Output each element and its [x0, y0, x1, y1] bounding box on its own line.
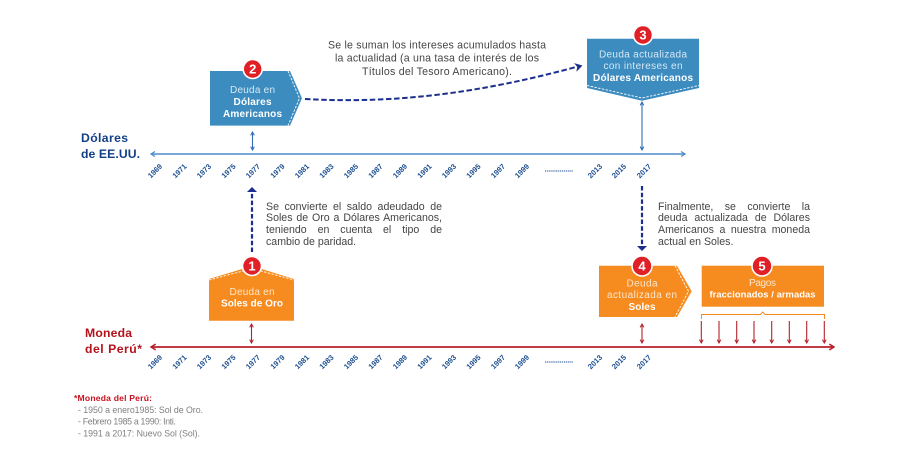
- dollar timeline years: 2013: [586, 162, 604, 180]
- footnote: Moneda del Perú: *Moneda del Perú:: [74, 393, 152, 403]
- step 4: orange box Deuda actualizada en Soles: [599, 256, 692, 317]
- dollar timeline years: 2017: [635, 162, 653, 180]
- text: conversion to soles: deuda actualizada de Dólares: [658, 212, 810, 224]
- step 4: orange box Deuda actualizada en Soles: 4: [638, 258, 646, 274]
- Peruvian timeline years: 1989: [391, 353, 409, 371]
- text: conversion to soles: Americanos a nuestra moneda: [658, 224, 810, 236]
- Peruvian timeline years: 1999: [513, 353, 531, 371]
- Peruvian timeline years: 2013: [586, 353, 604, 371]
- step 5: orange box Pagos fraccionados / armadas: fraccionados / armadas: [710, 288, 816, 299]
- text: conversion to dollars: Soles de Oro a Dólares Americanos,: [266, 212, 442, 224]
- Peruvian timeline years: 1985: [342, 353, 360, 371]
- step 3: blue box Deuda actualizada: 3: [639, 28, 647, 42]
- dashed curved arrow: step 2 to step 3: [305, 61, 584, 100]
- Peruvian timeline years: 1969: [146, 353, 164, 371]
- dollar timeline years: 1983: [317, 162, 336, 180]
- axis: dollar timeline: [151, 153, 685, 155]
- text: interest explanation: [328, 39, 546, 78]
- footnote: Moneda del Perú: - 1991 a 2017: Nuevo Sol (Sol).: [78, 429, 200, 439]
- Peruvian timeline years: 1973: [195, 353, 213, 371]
- double arrow: step 2 to dollar axis: [252, 132, 254, 150]
- dollar timeline years: 1991: [415, 162, 434, 180]
- double arrow: step 1 to Peruvian axis: [250, 324, 252, 343]
- step 2: blue box Deuda en Dólares Americanos: Dólares: [234, 97, 272, 108]
- step 2: blue box Deuda en Dólares Americanos: 2: [249, 62, 256, 76]
- dollar timeline years: 1975: [219, 162, 238, 180]
- dollar timeline years: 1987: [366, 162, 385, 180]
- Peruvian timeline years: 1995: [464, 353, 483, 371]
- step 3: blue box Deuda actualizada: [587, 26, 699, 101]
- text: interest explanation: Títulos del Tesoro Americano).: [362, 66, 512, 78]
- step 5: orange box Pagos fraccionados / armadas: [702, 256, 824, 307]
- step 5: orange box Pagos fraccionados / armadas: 5: [758, 258, 766, 274]
- text: conversion to dollars: Se convierte el saldo adeudado de: [266, 200, 442, 212]
- dollar timeline years: 1989: [391, 162, 409, 180]
- Peruvian timeline years: 1977: [244, 353, 262, 371]
- label: Dólares de EE.UU.: de EE.UU.: [81, 147, 140, 161]
- footnote: Moneda del Perú: - Febrero 1985 a 1990: Inti.: [78, 416, 176, 426]
- double arrow: step 3 to dollar axis: [641, 102, 643, 150]
- bracket: payments: [702, 312, 824, 319]
- text: interest explanation: la actualidad (a una tasa de interés de los: [335, 53, 539, 65]
- text: interest explanation: Se le suman los intereses acumulados hasta: [328, 39, 546, 51]
- text: conversion to soles: Finalmente, se convierte la: [658, 200, 810, 212]
- Peruvian timeline years: 1975: [219, 353, 238, 371]
- dotted gap: Peruvian timeline: [545, 361, 573, 363]
- payment arrows: [701, 321, 824, 343]
- Peruvian timeline years: 1983: [317, 353, 336, 371]
- Peruvian timeline years: 1993: [440, 353, 458, 371]
- dollar timeline years: 1985: [342, 162, 360, 180]
- dashed arrow: step 3 down to step 4: [637, 186, 647, 251]
- dollar timeline years: 1971: [170, 162, 189, 180]
- text: conversion to dollars: teniendo en cuenta el tipo de: [266, 224, 442, 236]
- step 1: orange box Deuda en Soles de Oro: [209, 256, 294, 321]
- step 4: orange box Deuda actualizada en Soles: actualizada en: [607, 290, 677, 301]
- dotted gap: dollar timeline: [545, 170, 573, 172]
- double arrow: step 4 to Peruvian axis: [641, 324, 643, 343]
- step 1: orange box Deuda en Soles de Oro: Soles de Oro: [221, 299, 283, 310]
- step 1: orange box Deuda en Soles de Oro: Deuda en: [230, 287, 274, 298]
- label: Dólares de EE.UU.: [81, 131, 140, 161]
- dollar timeline years: 1999: [513, 162, 531, 180]
- dollar timeline years: 1979: [268, 162, 287, 180]
- Peruvian timeline years: 1997: [489, 353, 507, 371]
- dollar timeline years: 1993: [440, 162, 458, 180]
- Peruvian timeline years: 1987: [366, 353, 385, 371]
- label: Moneda del Perú: [85, 326, 142, 356]
- text: conversion to soles: actual en Soles.: [658, 236, 733, 248]
- Peruvian timeline years: 1991: [415, 353, 434, 371]
- text: conversion to soles: [658, 200, 810, 248]
- step 1: orange box Deuda en Soles de Oro: 1: [248, 258, 256, 274]
- Peruvian timeline years: 2017: [635, 353, 653, 371]
- label: Moneda del Perú: del Perú*: [85, 342, 142, 356]
- Peruvian timeline years: 1979: [268, 353, 287, 371]
- step 2: blue box Deuda en Dólares Americanos: Deuda en: [230, 85, 275, 96]
- footnote: Moneda del Perú: [74, 393, 203, 439]
- Peruvian timeline years: 1981: [293, 353, 311, 371]
- dollar timeline years: 1981: [293, 162, 311, 180]
- label: Dólares de EE.UU.: Dólares: [81, 131, 128, 145]
- Peruvian timeline years: [146, 353, 653, 371]
- step 4: orange box Deuda actualizada en Soles: Deuda: [626, 279, 658, 290]
- dollar timeline years: 1995: [464, 162, 483, 180]
- dollar timeline years: 2015: [610, 162, 628, 180]
- footnote: Moneda del Perú: - 1950 a enero1985: Sol de Oro.: [78, 405, 203, 415]
- dollar timeline years: 1977: [244, 162, 262, 180]
- axis: Peruvian currency timeline: [151, 346, 834, 348]
- step 2: blue box Deuda en Dólares Americanos: Americanos: [223, 109, 282, 120]
- Peruvian timeline years: 1971: [170, 353, 189, 371]
- dollar timeline years: [146, 162, 653, 180]
- step 3: blue box Deuda actualizada: con intereses en: [604, 61, 682, 72]
- Peruvian timeline years: 2015: [610, 353, 628, 371]
- step 4: orange box Deuda actualizada en Soles: Soles: [628, 302, 656, 313]
- step 5: orange box Pagos fraccionados / armadas: Pagos: [749, 278, 776, 289]
- step 2: blue box Deuda en Dólares Americanos: [210, 60, 302, 126]
- text: conversion to dollars: cambio de paridad.: [266, 236, 356, 248]
- dollar timeline years: 1969: [146, 162, 164, 180]
- dollar timeline years: 1997: [489, 162, 507, 180]
- dollar timeline years: 1973: [195, 162, 213, 180]
- label: Moneda del Perú: Moneda: [85, 326, 132, 340]
- step 3: blue box Deuda actualizada: Deuda actualizada: [599, 50, 687, 61]
- dashed arrow: step 1 up to step 2: [247, 187, 257, 252]
- text: conversion to dollars: [266, 200, 442, 248]
- step 3: blue box Deuda actualizada: Dólares Americanos: [593, 73, 693, 84]
